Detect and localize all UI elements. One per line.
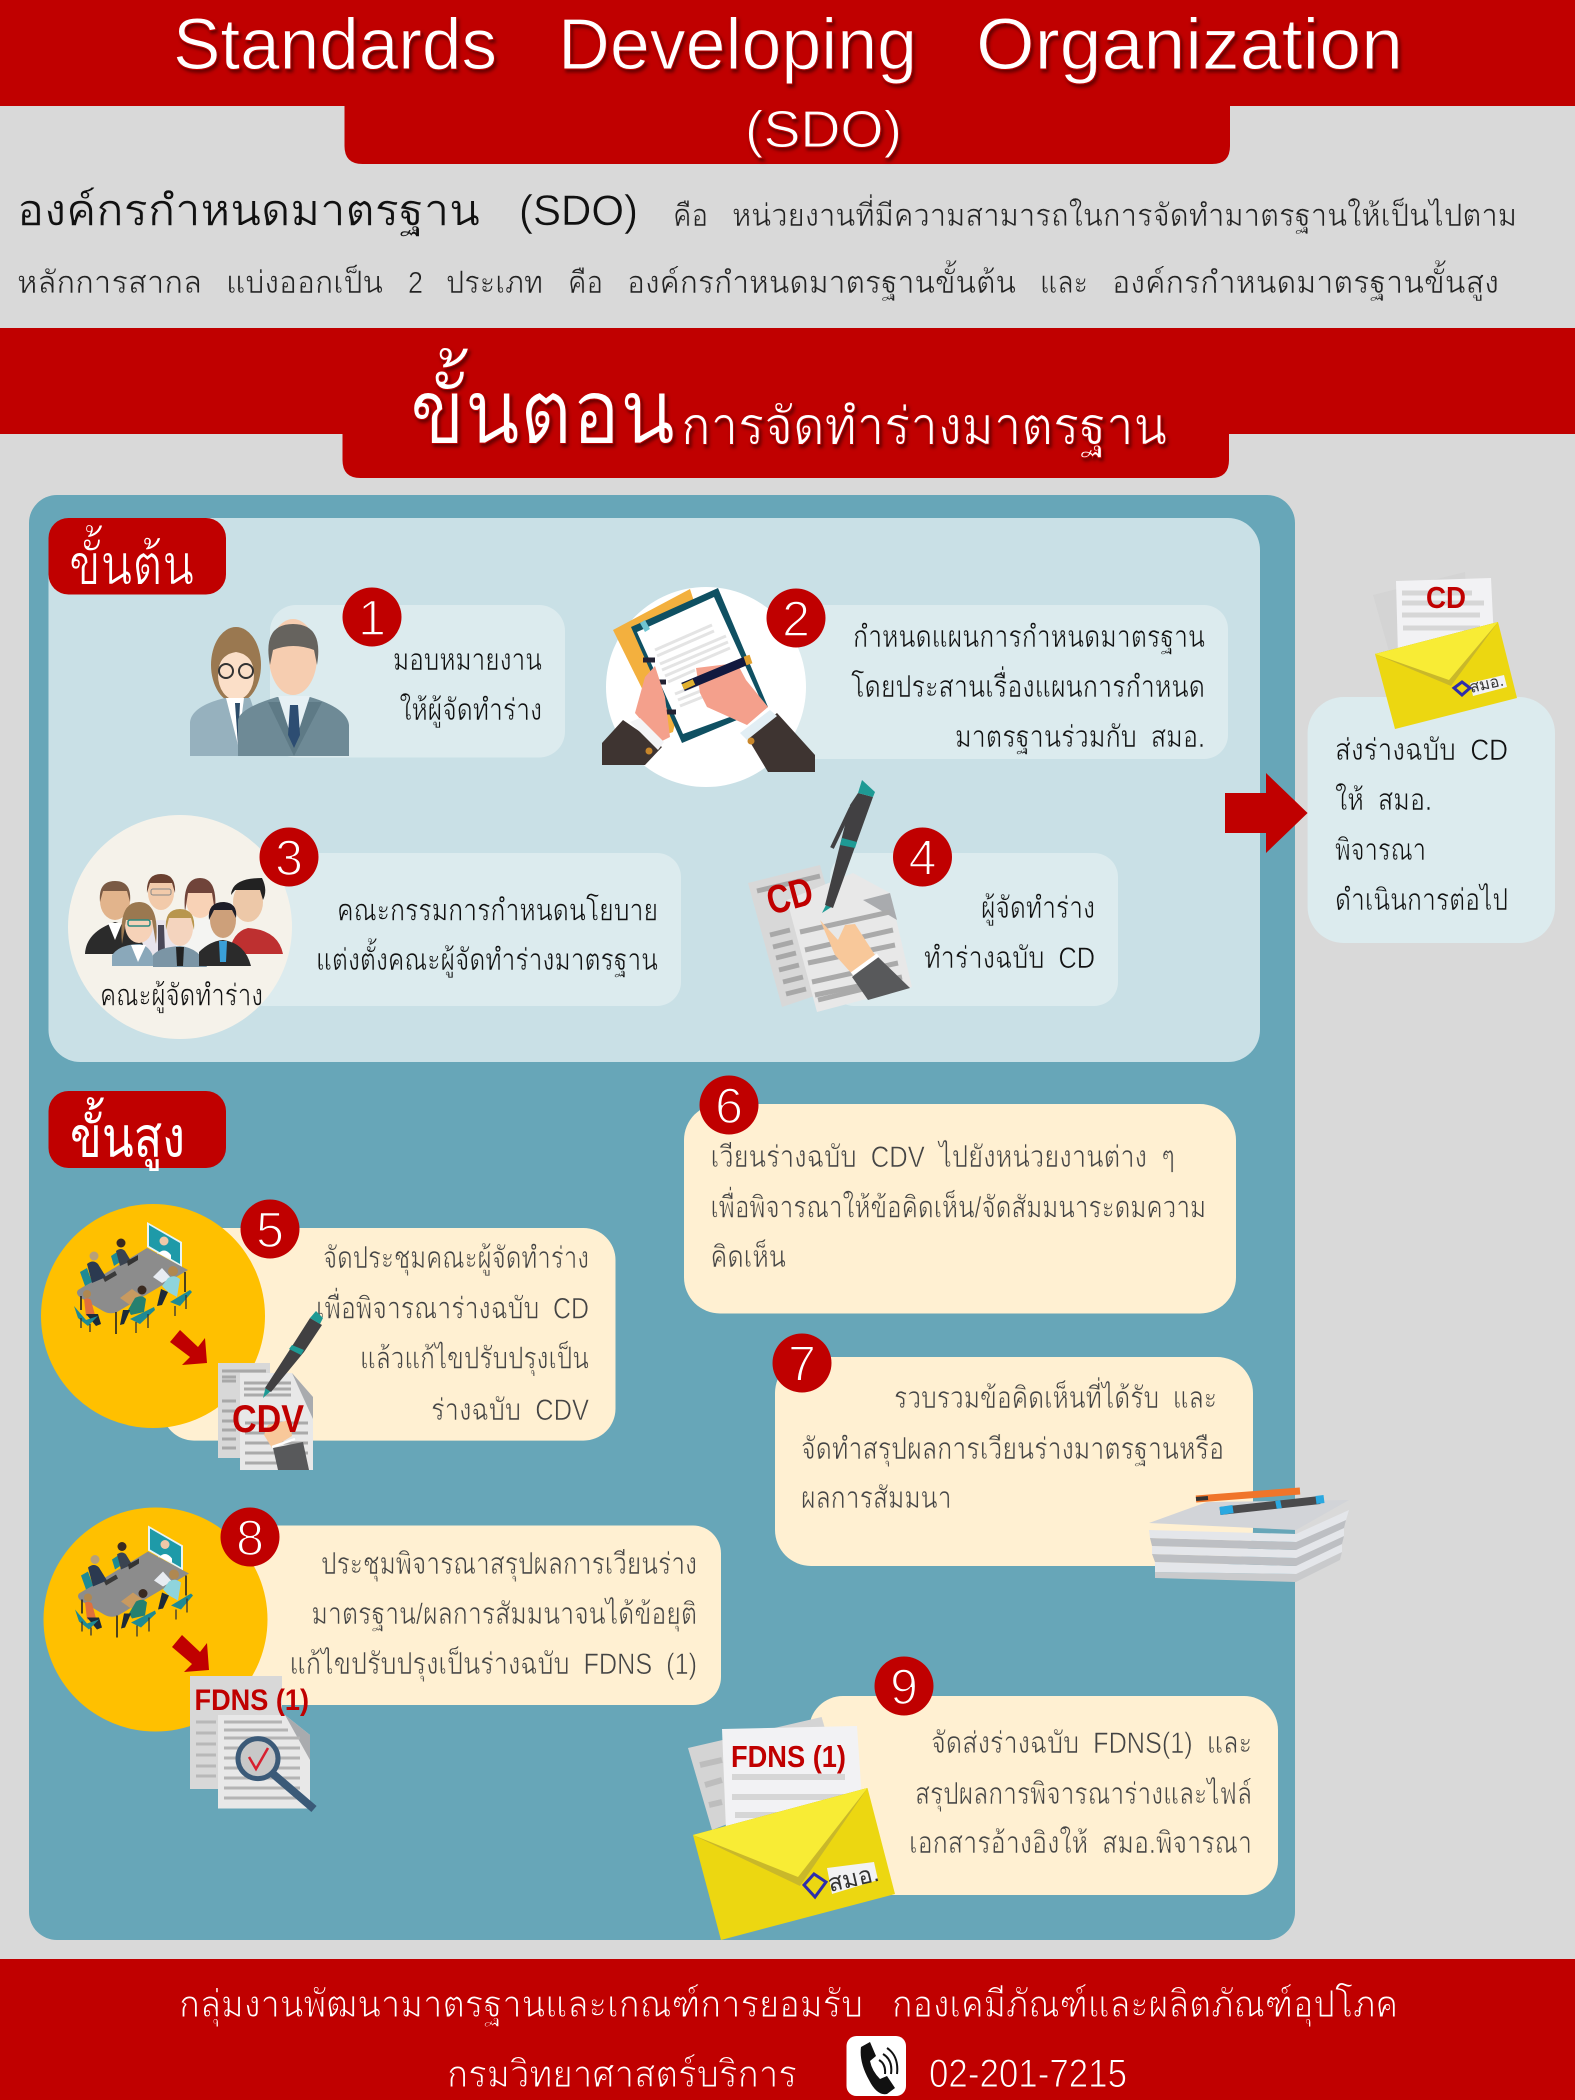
title: Developing: [558, 5, 917, 85]
number badge 7: 7: [788, 1336, 816, 1392]
intro paragraph: แบ่งออกเป็น: [226, 264, 383, 300]
step 9: [688, 1656, 1278, 1940]
text: step 5: เพื่อพิจารณาร่างฉบับ CD: [316, 1288, 589, 1326]
panel: basic level: [48, 518, 1260, 1062]
step 6: [684, 1076, 1236, 1314]
text: step 9: เอกสารอ้างอิงให้ สมอ.พิจารณา: [909, 1826, 1252, 1860]
text: step 3: แต่งตั้งคณะผู้จัดทำร่างมาตรฐาน: [316, 938, 658, 978]
subtitle: SDO: (SDO): [745, 101, 902, 159]
text: step 1: ให้ผู้จัดทำร่าง: [400, 693, 542, 728]
text: send draft: ส่งร่างฉบับ CD: [1335, 734, 1508, 767]
text: step 5: ร่างฉบับ CDV: [431, 1394, 589, 1427]
icon: hands signing document: [602, 588, 815, 772]
icon: FDNS document with magnifier: [190, 1676, 314, 1809]
text: send draft: ให้ สมอ.: [1335, 783, 1432, 817]
intro paragraph: และ: [1040, 265, 1088, 300]
number badge 8: 8: [236, 1510, 264, 1566]
intro paragraph: คือ: [568, 265, 603, 300]
main teal panel: [29, 495, 1295, 1940]
icon: two officers: [190, 619, 349, 756]
text: send draft: พิจารณา: [1335, 834, 1426, 867]
text: step 2: กำหนดแผนการกำหนดมาตรฐาน: [853, 621, 1205, 655]
text: step 2: โดยประสานเรื่องแผนการกำหนด: [851, 666, 1205, 704]
icon: envelope with FDNS draft: FDNS (1): [731, 1739, 846, 1774]
step 8: [44, 1508, 721, 1809]
caption: drafting committee: คณะผู้จัดทำร่าง: [100, 980, 263, 1014]
panel: send CD to TISI: [1308, 572, 1555, 943]
intro paragraph: องค์กรกำหนดมาตรฐาน: [17, 187, 480, 236]
text: step 2: มาตรฐานร่วมกับ สมอ.: [955, 721, 1205, 755]
footer text: department: กรมวิทยาศาสตร์บริการ: [447, 2053, 797, 2096]
icon: envelope with CD draft: สมอ.: [1468, 673, 1505, 697]
text: step 7: จัดทำสรุปผลการเวียนร่างมาตรฐานหรือ: [801, 1433, 1224, 1468]
arrow: meeting to draft: [172, 1635, 209, 1672]
text: step 7: [801, 1377, 1224, 1515]
number badge 2: [766, 588, 826, 648]
number badge 3: [260, 828, 318, 886]
number badge 9: 9: [890, 1659, 918, 1715]
icon: CDV document: CDV: [232, 1398, 304, 1441]
title: [173, 5, 1403, 85]
icon: meeting: [74, 1222, 192, 1334]
intro paragraph: หลักการสากล: [17, 265, 202, 300]
section banner: drafting steps: [0, 328, 1575, 478]
step 7: [772, 1334, 1349, 1582]
number badge 7: [772, 1334, 832, 1392]
footer text: phone number: 02-201-7215: [929, 2052, 1127, 2096]
footer text: division name: กองเคมีภัณฑ์และผลิตภัณฑ์อุปโภค: [892, 1982, 1398, 2027]
number badge 5: [240, 1200, 300, 1258]
intro paragraph: ประเภท: [446, 265, 543, 300]
icon: CD draft document: [748, 780, 912, 1012]
intro paragraph: คือ: [673, 198, 708, 233]
icon: FDNS document with magnifier: FDNS (1): [194, 1684, 309, 1717]
label: advanced level: [48, 1091, 226, 1172]
text: send draft: [1335, 734, 1508, 917]
intro paragraph: หน่วยงานที่มีความสามารถในการจัดทำมาตรฐานให้เป็นไปตาม: [732, 194, 1517, 234]
text: step 1: [393, 644, 542, 728]
label: basic level: [48, 518, 226, 596]
step 4: [748, 780, 1118, 1012]
number badge 2: 2: [782, 591, 810, 647]
text: step 4: [924, 892, 1095, 975]
title: Organization: [976, 5, 1403, 85]
number badge 8: [220, 1508, 280, 1566]
text: step 8: [290, 1548, 697, 1683]
number badge 3: 3: [275, 830, 303, 886]
text: step 9: [909, 1727, 1252, 1860]
icon: meeting: [75, 1526, 193, 1638]
icon: paper stack with pens: [1149, 1491, 1349, 1582]
icon: envelope with CD draft: [1373, 572, 1517, 729]
text: step 6: คิดเห็น: [710, 1238, 786, 1274]
title banner: [0, 0, 1575, 164]
intro paragraph: 2: [408, 265, 423, 300]
text: step 3: [316, 892, 658, 978]
intro paragraph: [17, 187, 1517, 301]
icon: phone: [846, 2036, 906, 2096]
heading: การจัดทำร่างมาตรฐาน: [681, 398, 1167, 457]
text: step 6: [710, 1139, 1206, 1274]
text: step 8: ประชุมพิจารณาสรุปผลการเวียนร่าง: [321, 1548, 697, 1583]
text: step 1: มอบหมายงาน: [393, 644, 542, 677]
number badge 6: 6: [715, 1078, 743, 1134]
icon: committee group: [85, 874, 283, 967]
step 2: [602, 587, 1228, 787]
text: send draft: ดำเนินการต่อไป: [1335, 882, 1508, 917]
footer text: division name: กลุ่มงานพัฒนามาตรฐานและเกณฑ์การยอมรับ: [179, 1983, 863, 2027]
icon: envelope with FDNS draft: สมอ.: [825, 1860, 882, 1898]
footer text: division name: [179, 1982, 1398, 2027]
step 3: [68, 815, 681, 1039]
text: step 7: ผลการสัมมนา: [801, 1482, 952, 1515]
footer band: [0, 1959, 1575, 2100]
number badge 4: 4: [909, 830, 936, 886]
text: step 4: ทำร่างฉบับ CD: [924, 942, 1095, 975]
text: step 6: เวียนร่างฉบับ CDV ไปยังหน่วยงานต่าง ๆ: [710, 1139, 1175, 1174]
icon: CD draft document: CD: [762, 869, 818, 924]
number badge 5: 5: [256, 1202, 284, 1258]
number badge 4: [893, 828, 952, 886]
icon: envelope with FDNS draft: [688, 1717, 895, 1940]
number badge 6: [700, 1076, 758, 1134]
heading: ขั้นตอน: [410, 348, 675, 463]
label: advanced level: ขั้นสูง: [70, 1098, 185, 1172]
icon: CDV document: [218, 1311, 323, 1470]
text: step 3: คณะกรรมการกำหนดนโยบาย: [337, 892, 658, 928]
step 5: [41, 1200, 616, 1470]
text: step 5: จัดประชุมคณะผู้จัดทำร่าง: [323, 1242, 589, 1277]
text: step 5: แล้วแก้ไขปรับปรุงเป็น: [360, 1339, 589, 1377]
text: step 8: มาตรฐาน/ผลการสัมมนาจนได้ข้อยุติ: [312, 1596, 697, 1633]
number badge 1: 1: [358, 590, 386, 646]
title: Standards: [173, 5, 497, 85]
icon: envelope with CD draft: CD: [1426, 580, 1466, 615]
text: step 4: ผู้จัดทำร่าง: [981, 892, 1095, 926]
text: step 5: [316, 1242, 589, 1427]
label: basic level: ขั้นต้น: [69, 525, 194, 596]
text: step 9: สรุปผลการพิจารณาร่างและไฟล์: [915, 1776, 1252, 1813]
intro paragraph: (SDO): [519, 187, 638, 235]
number badge 1: [342, 588, 402, 646]
text: step 9: จัดส่งร่างฉบับ FDNS(1) และ: [931, 1727, 1252, 1760]
arrow to SDO box: [1225, 773, 1308, 853]
number badge 9: [874, 1656, 934, 1716]
text: step 7: รวบรวมข้อคิดเห็นที่ได้รับ และ: [894, 1377, 1217, 1415]
intro paragraph: องค์กรกำหนดมาตรฐานขั้นต้น: [627, 260, 1016, 301]
text: step 8: แก้ไขปรับปรุงเป็นร่างฉบับ FDNS (1): [290, 1645, 697, 1683]
intro paragraph: องค์กรกำหนดมาตรฐานขั้นสูง: [1112, 260, 1499, 301]
heading: [410, 348, 1167, 463]
arrow: meeting to draft: [170, 1330, 207, 1365]
text: step 2: [851, 621, 1205, 755]
text: step 6: เพื่อพิจารณาให้ข้อคิดเห็น/จัดสัมมนาระดมความ: [710, 1186, 1206, 1224]
step 1: [190, 588, 565, 758]
